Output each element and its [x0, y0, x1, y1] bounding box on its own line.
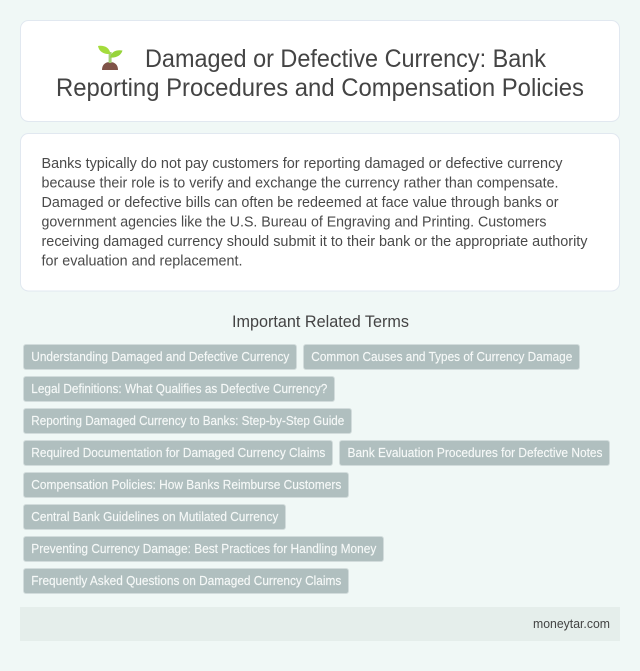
summary text: Damaged or defective bills can often be redeemed at face value through banks or [42, 195, 559, 211]
tag: compensation policies [24, 472, 348, 498]
tag: required documentation: Required Documentation for Damaged Currency Claims [31, 445, 326, 460]
summary text: because their role is to verify and exchange the currency rather than compensate. [42, 175, 558, 191]
tag: required documentation [24, 440, 332, 466]
tag: bank evaluation: Bank Evaluation Procedures for Defective Notes [348, 445, 603, 460]
tag: reporting [24, 408, 352, 434]
tag: faq [24, 568, 348, 594]
summary text: receiving damaged currency should submit it to their bank or the appropriate authority [42, 234, 588, 250]
tag: understanding: Understanding Damaged and Defective Currency [31, 349, 290, 364]
title text: Damaged or Defective Currency: Bank [145, 45, 546, 73]
tag: bank evaluation [340, 440, 610, 466]
footer bar [20, 607, 620, 641]
tag: preventing damage: Preventing Currency Damage: Best Practices for Handling Money [31, 541, 377, 556]
heading: important related terms: Important Related Terms [232, 312, 409, 331]
summary text: for evaluation and replacement. [42, 253, 242, 269]
footer source text: moneytar.com [533, 616, 610, 631]
summary text [42, 156, 588, 269]
tag: legal definitions [24, 376, 334, 402]
tag: central bank: Central Bank Guidelines on Mutilated Currency [31, 509, 279, 524]
tag: compensation policies: Compensation Policies: How Banks Reimburse Customers [31, 477, 342, 492]
icon: sprout [98, 46, 122, 70]
title text: Reporting Procedures and Compensation Policies [56, 74, 584, 102]
tag: reporting: Reporting Damaged Currency to Banks: Step-by-Step Guide [31, 413, 344, 428]
panel: title card [20, 20, 620, 122]
title text [56, 45, 584, 102]
tag: common causes: Common Causes and Types of Currency Damage [311, 349, 572, 364]
tag: central bank [24, 504, 286, 530]
tag: legal definitions: Legal Definitions: What Qualifies as Defective Currency? [31, 381, 327, 396]
tag: understanding [24, 344, 296, 370]
summary text: Banks typically do not pay customers for reporting damaged or defective currency [42, 156, 563, 172]
tag: faq: Frequently Asked Questions on Damaged Currency Claims [31, 573, 342, 588]
tag list [24, 344, 610, 594]
tag: common causes [304, 344, 580, 370]
summary text: government agencies like the U.S. Bureau of Engraving and Printing. Customers [42, 214, 546, 230]
panel: summary card [20, 134, 620, 291]
tag: preventing damage [24, 536, 384, 562]
